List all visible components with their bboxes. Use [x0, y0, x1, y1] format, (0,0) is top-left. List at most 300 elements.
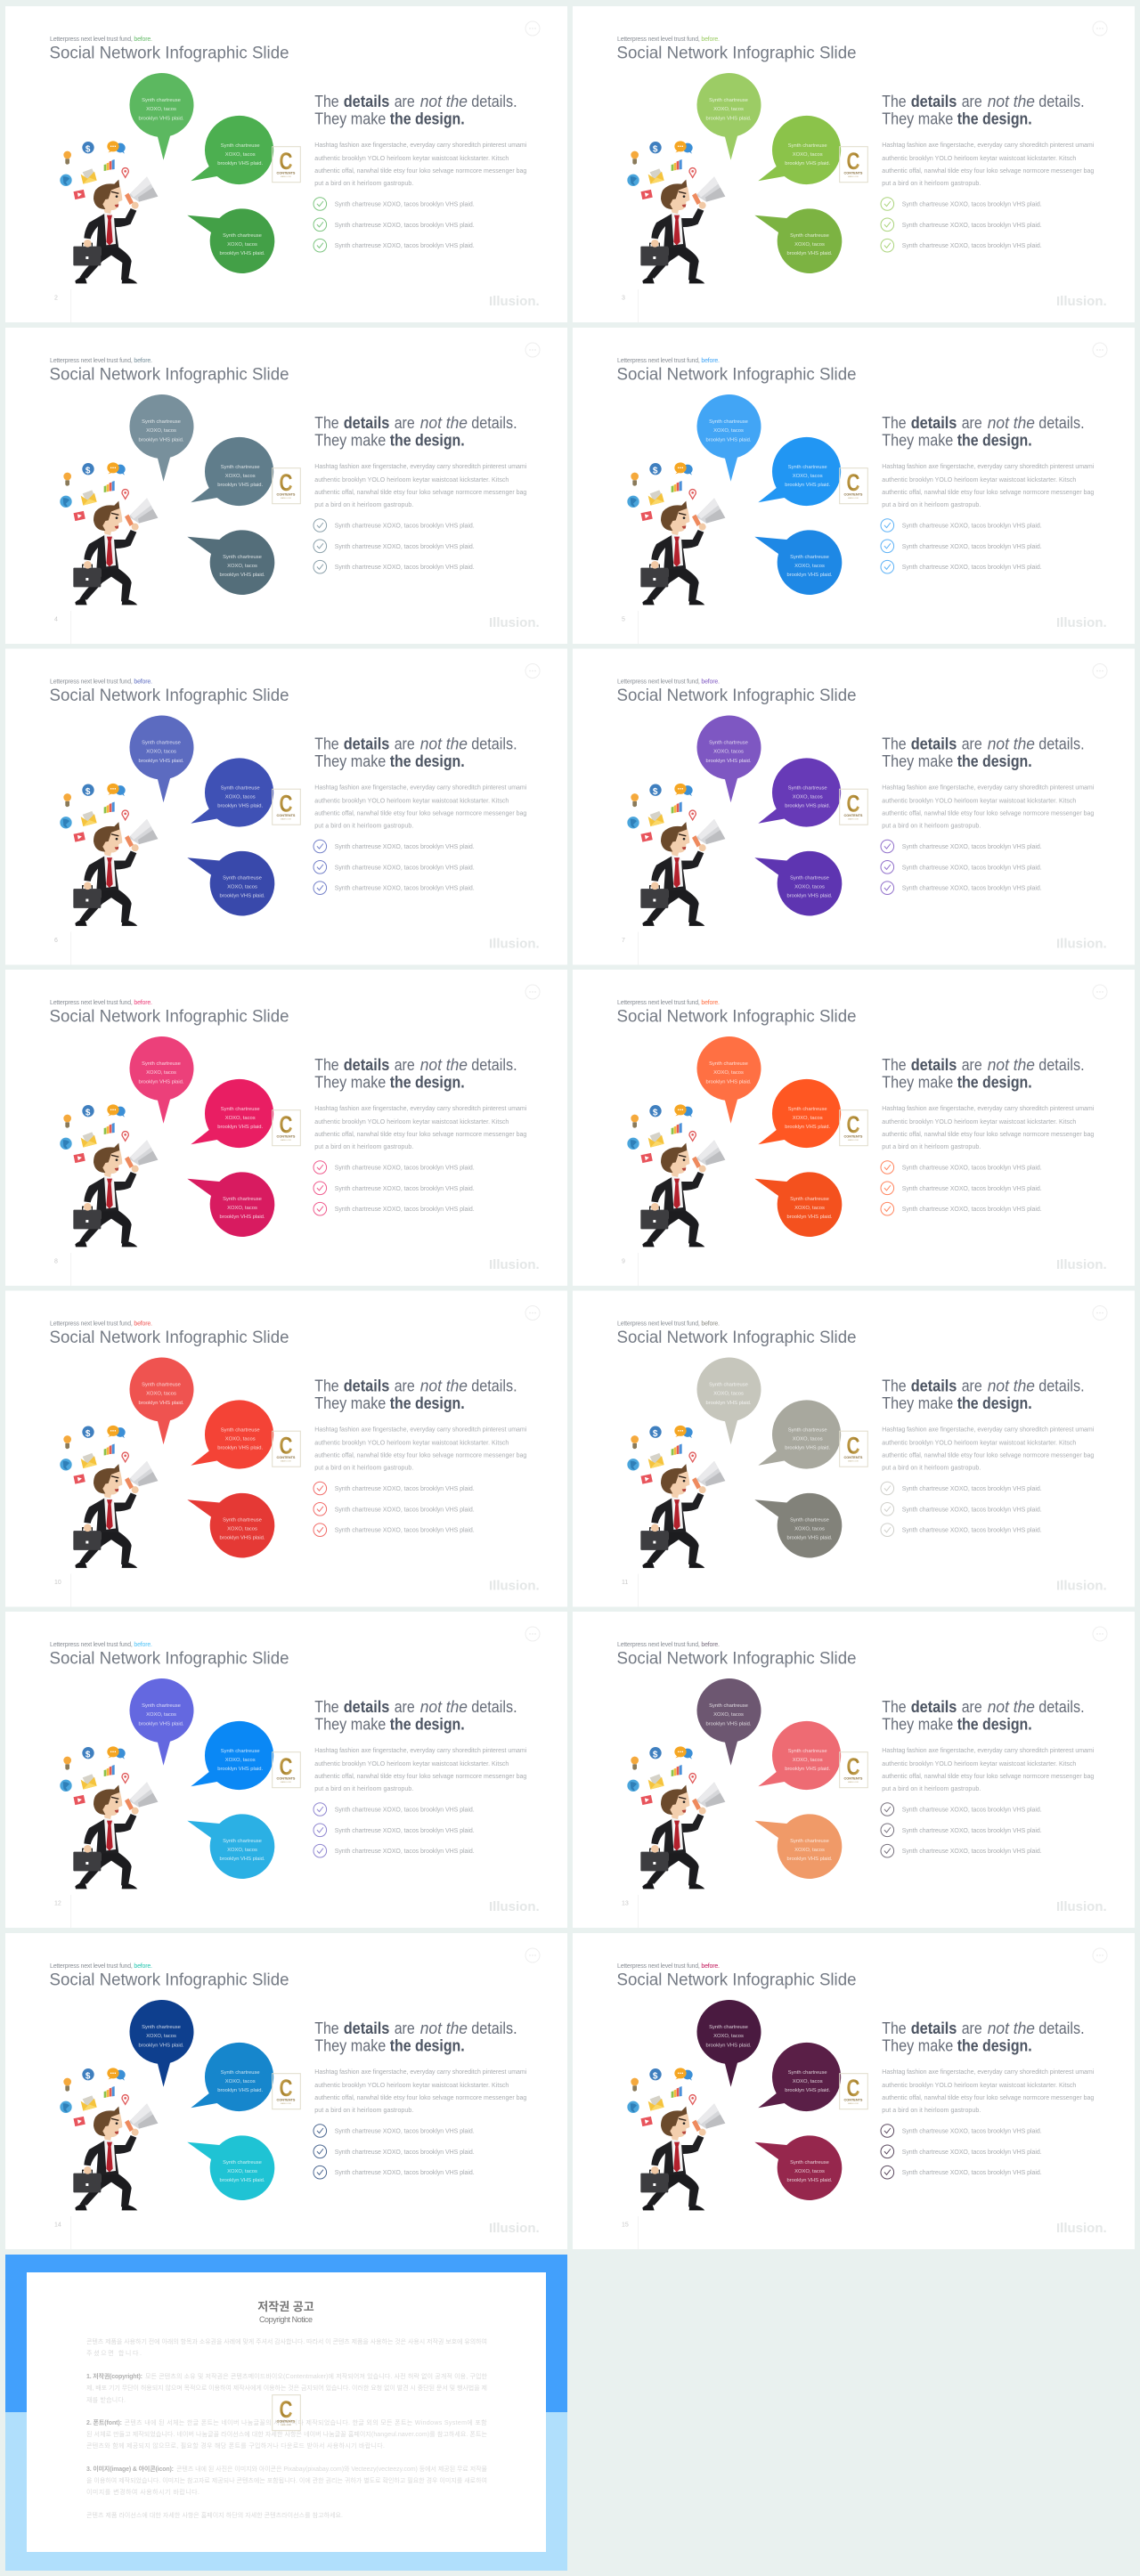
speech bubble 1: XOXO, tacos — [713, 750, 744, 755]
footer: Illusion. — [489, 294, 540, 309]
heading: not the — [988, 93, 1035, 110]
checklist: Synth chartreuse XOXO, tacos brooklyn VHS plaid. — [902, 1849, 1042, 1855]
speech bubble 3: brooklyn VHS plaid. — [220, 1535, 265, 1540]
speech bubble 2 — [191, 1079, 273, 1148]
body text — [882, 2069, 1095, 2114]
body text — [882, 785, 1095, 830]
footer: Illusion. — [1056, 615, 1107, 630]
body text: put a bird on it heirloom gastropub. — [882, 1786, 981, 1792]
heading: not the — [420, 1056, 468, 1074]
slide background — [5, 1291, 567, 1606]
speech bubble 3: brooklyn VHS plaid. — [220, 251, 265, 256]
speech bubble 3 — [187, 1814, 274, 1879]
slide 12: plum, coral and peach — [573, 1612, 1135, 1928]
speech bubble 1: Synth chartreuse — [709, 98, 748, 103]
heading: are — [962, 93, 982, 110]
checklist — [314, 2125, 475, 2179]
heading: The — [882, 93, 907, 110]
heading: are — [395, 414, 415, 432]
heading: They make — [882, 752, 953, 770]
body text: put a bird on it heirloom gastropub. — [314, 1786, 413, 1792]
body text: Hashtag fashion axe fingerstache, everyday carry shoreditch pinterest umami — [882, 1106, 1095, 1112]
watermark logo: C — [846, 148, 860, 175]
speech bubble 2 — [191, 1721, 273, 1790]
speech bubble 1: brooklyn VHS plaid. — [706, 116, 752, 121]
body text: authentic offal, narwhal tilde etsy four loko selvage normcore messenger bag — [882, 1132, 1094, 1138]
clause 3: images and icons: 이미지를 변경하여 사용하시기 바랍니다. — [86, 2488, 200, 2496]
heading: are — [962, 1377, 982, 1394]
options icon — [1093, 343, 1107, 357]
businessman with megaphone — [73, 1461, 158, 1568]
speech bubble 1 — [696, 1678, 761, 1766]
icon cluster: $ — [653, 467, 658, 475]
heading: The — [314, 414, 339, 432]
checklist: Synth chartreuse XOXO, tacos brooklyn VHS plaid. — [335, 2170, 475, 2176]
speech bubble 3 — [754, 1814, 842, 1879]
checklist: Synth chartreuse XOXO, tacos brooklyn VHS plaid. — [335, 2128, 475, 2135]
slide background — [573, 328, 1135, 644]
speech bubble 1 — [129, 1678, 193, 1766]
speech bubble 3: XOXO, tacos — [227, 885, 257, 890]
footer — [54, 931, 540, 965]
body text — [314, 1106, 527, 1150]
body text: Hashtag fashion axe fingerstache, everyday carry shoreditch pinterest umami — [314, 464, 527, 470]
speech bubble 2: Synth chartreuse — [221, 785, 260, 791]
watermark logo: MADE LOOK — [281, 175, 292, 178]
checklist: Synth chartreuse XOXO, tacos brooklyn VHS plaid. — [902, 565, 1042, 571]
watermark logo: MADE LOOK — [281, 2102, 292, 2105]
heading: They make — [882, 1073, 953, 1091]
body text — [314, 464, 527, 508]
watermark logo — [273, 2395, 300, 2431]
heading: details — [344, 1377, 389, 1394]
speech bubble 3: Synth chartreuse — [790, 876, 829, 882]
options icon — [525, 1305, 540, 1320]
speech bubble 3: XOXO, tacos — [227, 564, 257, 569]
slide 13: navy, blue and teal — [5, 1933, 567, 2249]
title: Social Network Infographic Slide — [50, 365, 289, 385]
checklist: Synth chartreuse XOXO, tacos brooklyn VHS plaid. — [335, 1849, 475, 1855]
heading: the design. — [390, 752, 465, 770]
speech bubble 1: XOXO, tacos — [146, 750, 176, 755]
options icon — [525, 1627, 540, 1641]
speech bubble 1: brooklyn VHS plaid. — [706, 438, 752, 443]
heading: details — [344, 2019, 389, 2037]
businessman with megaphone — [640, 819, 725, 926]
footer: 11 — [622, 1580, 628, 1586]
heading: not the — [988, 1377, 1035, 1394]
speech bubble 2: Synth chartreuse — [221, 465, 260, 470]
speech bubble 3: XOXO, tacos — [794, 2169, 825, 2174]
speech bubble 1: Synth chartreuse — [709, 419, 748, 425]
icon cluster: $ — [653, 787, 658, 797]
speech bubble 1: Synth chartreuse — [709, 1703, 748, 1709]
speech bubble 3: brooklyn VHS plaid. — [787, 1857, 833, 1862]
watermark logo: CONTENTS — [844, 2098, 863, 2101]
businessman with megaphone — [640, 498, 725, 605]
footer: 10 — [54, 1580, 61, 1586]
speech bubble 1: XOXO, tacos — [146, 1070, 176, 1076]
footer: 13 — [622, 1900, 629, 1907]
speech bubble 1: Synth chartreuse — [709, 1382, 748, 1387]
slide 1: green — [5, 6, 567, 322]
speech bubble 1: XOXO, tacos — [713, 428, 744, 434]
speech bubble 3 — [187, 530, 274, 595]
speech bubble 3 — [187, 851, 274, 915]
speech bubble 3: XOXO, tacos — [794, 564, 825, 569]
heading: not the — [420, 1377, 468, 1394]
speech bubble 3: brooklyn VHS plaid. — [787, 251, 833, 256]
checklist — [881, 1803, 1042, 1857]
speech bubble 1: brooklyn VHS plaid. — [139, 116, 184, 121]
speech bubble 1: XOXO, tacos — [713, 1712, 744, 1718]
watermark logo — [273, 1110, 300, 1146]
blue top background — [5, 2255, 567, 2412]
slide 6: deep purple — [573, 648, 1135, 965]
speech bubble 1 — [129, 73, 193, 160]
speech bubble 2 — [758, 1400, 841, 1469]
body text — [314, 142, 527, 187]
body text: authentic offal, narwhal tilde etsy four loko selvage normcore messenger bag — [314, 1774, 526, 1780]
speech bubble 1: brooklyn VHS plaid. — [706, 1401, 752, 1406]
watermark logo: C — [280, 1111, 292, 1138]
body text: put a bird on it heirloom gastropub. — [314, 181, 413, 187]
body text: authentic brooklyn YOLO heirloom keytar waistcoat kickstarter. Kitsch — [882, 1119, 1076, 1125]
checklist: Synth chartreuse XOXO, tacos brooklyn VHS plaid. — [335, 201, 475, 208]
slide background — [5, 1933, 567, 2249]
options icon — [525, 1948, 540, 1962]
speech bubble 1: Synth chartreuse — [142, 1382, 181, 1387]
heading: details — [344, 1698, 389, 1716]
title: Social Network Infographic Slide — [50, 43, 289, 62]
checklist: Synth chartreuse XOXO, tacos brooklyn VHS plaid. — [335, 865, 475, 871]
slide background — [5, 6, 567, 322]
speech bubble 1: Synth chartreuse — [709, 1061, 748, 1067]
businessman with megaphone — [73, 1782, 158, 1889]
body text — [882, 142, 1095, 187]
title: Social Network Infographic Slide — [616, 365, 857, 385]
clause 2: font — [86, 2418, 488, 2450]
speech bubble 2: XOXO, tacos — [793, 1116, 823, 1121]
heading: The — [882, 2019, 907, 2037]
speech bubble 3: brooklyn VHS plaid. — [787, 2178, 833, 2183]
checklist: Synth chartreuse XOXO, tacos brooklyn VHS plaid. — [902, 1528, 1042, 1534]
footer: Illusion. — [489, 1578, 540, 1594]
heading — [314, 93, 517, 127]
footer: Illusion. — [1056, 2221, 1107, 2236]
clause 2: font: 콘텐츠 내에 된 서체는 한글 폰트는 네이버 나눔글꼴의 서체입니다 제작되었습니다. 한글 외의 모든 폰트는 Windows System에 포함 — [125, 2418, 487, 2426]
copyright notice slide — [5, 2255, 567, 2571]
businessman with megaphone — [640, 176, 725, 283]
speech bubble 2: brooklyn VHS plaid. — [217, 1767, 264, 1772]
options icon — [1093, 985, 1107, 999]
heading: the design. — [957, 2036, 1032, 2054]
heading — [314, 1698, 517, 1733]
watermark logo: C — [846, 1432, 860, 1459]
speech bubble 2: Synth chartreuse — [788, 785, 827, 791]
speech bubble 2: XOXO, tacos — [225, 1116, 256, 1121]
body text — [882, 464, 1095, 508]
footer — [622, 289, 1107, 322]
watermark logo — [273, 147, 300, 183]
checklist — [314, 519, 475, 573]
title: Social Network Infographic Slide — [50, 1649, 289, 1669]
icon cluster — [627, 141, 696, 199]
speech bubble 3: Synth chartreuse — [790, 233, 829, 239]
businessman with megaphone — [73, 819, 158, 926]
speech bubble 3 — [754, 851, 842, 915]
body text: authentic brooklyn YOLO heirloom keytar waistcoat kickstarter. Kitsch — [314, 1440, 509, 1446]
heading: They make — [882, 431, 953, 449]
watermark logo — [840, 2074, 867, 2109]
watermark logo: CONTENTS — [277, 814, 296, 817]
heading: not the — [420, 93, 468, 110]
body text: put a bird on it heirloom gastropub. — [882, 1466, 981, 1472]
speech bubble 2: XOXO, tacos — [225, 152, 256, 158]
heading: details. — [1038, 1698, 1085, 1716]
watermark logo: MADE LOOK — [281, 817, 292, 821]
body text: put a bird on it heirloom gastropub. — [882, 2108, 981, 2114]
body text: authentic brooklyn YOLO heirloom keytar waistcoat kickstarter. Kitsch — [314, 1761, 509, 1767]
speech bubble 1 — [129, 1357, 193, 1444]
title: Social Network Infographic Slide — [50, 686, 289, 705]
title: Social Network Infographic Slide — [616, 686, 857, 705]
slide background — [573, 1291, 1135, 1606]
heading — [882, 1698, 1085, 1733]
speech bubble 1: XOXO, tacos — [713, 107, 744, 112]
speech bubble 3: brooklyn VHS plaid. — [787, 894, 833, 899]
speech bubble 3: XOXO, tacos — [227, 1848, 257, 1853]
icon cluster: $ — [653, 2071, 658, 2082]
heading: not the — [988, 2019, 1035, 2037]
watermark logo: MADE LOOK — [281, 497, 292, 500]
footer — [622, 1574, 1107, 1606]
heading: The — [882, 1698, 907, 1716]
heading: details. — [471, 2019, 517, 2037]
speech bubble 1 — [696, 1036, 761, 1124]
speech bubble 3: brooklyn VHS plaid. — [220, 573, 265, 578]
slide 8: deep orange — [573, 970, 1135, 1286]
heading: The — [314, 1377, 339, 1394]
checklist: Synth chartreuse XOXO, tacos brooklyn VHS plaid. — [335, 1207, 475, 1213]
heading: They make — [314, 1715, 386, 1733]
options icon — [1093, 1948, 1107, 1962]
body text: put a bird on it heirloom gastropub. — [882, 181, 981, 187]
heading: details. — [1038, 735, 1085, 753]
body text: put a bird on it heirloom gastropub. — [882, 824, 981, 830]
heading: details. — [1038, 1056, 1085, 1074]
watermark logo: CONTENTS — [844, 493, 863, 497]
watermark logo: C — [280, 2075, 292, 2101]
small heading: Letterpress next level trust fund, before. — [617, 1000, 720, 1006]
checklist: Synth chartreuse XOXO, tacos brooklyn VHS plaid. — [902, 1808, 1042, 1813]
body text: Hashtag fashion axe fingerstache, everyday carry shoreditch pinterest umami — [314, 785, 527, 791]
body text: Hashtag fashion axe fingerstache, everyday carry shoreditch pinterest umami — [314, 1106, 527, 1112]
icon cluster — [60, 141, 128, 199]
body text — [314, 1426, 527, 1472]
speech bubble 1: brooklyn VHS plaid. — [139, 1079, 184, 1085]
watermark logo: MADE LOOK — [281, 2424, 292, 2426]
speech bubble 2: brooklyn VHS plaid. — [217, 161, 264, 167]
options icon — [525, 985, 540, 999]
heading: details. — [471, 735, 517, 753]
icon cluster — [60, 1746, 128, 1805]
small heading: Letterpress next level trust fund, before. — [50, 1000, 152, 1006]
speech bubble 3 — [187, 208, 274, 273]
watermark logo: MADE LOOK — [848, 497, 859, 500]
heading: the design. — [390, 1394, 465, 1412]
heading: They make — [882, 1715, 953, 1733]
businessman with megaphone — [73, 498, 158, 605]
body text: authentic offal, narwhal tilde etsy four loko selvage normcore messenger bag — [314, 490, 526, 496]
speech bubble 3 — [754, 1172, 842, 1237]
notice title: 저작권 공고 — [257, 2300, 314, 2313]
speech bubble 2: XOXO, tacos — [225, 474, 256, 479]
speech bubble 3: XOXO, tacos — [794, 885, 825, 890]
small heading: Letterpress next level trust fund, before. — [617, 358, 720, 364]
watermark logo: C — [846, 791, 860, 817]
speech bubble 3: brooklyn VHS plaid. — [787, 1535, 833, 1540]
watermark logo: CONTENTS — [277, 493, 296, 497]
speech bubble 3 — [187, 1493, 274, 1557]
intro paragraph: 주셨으면 합니다. — [86, 2349, 142, 2357]
icon cluster: $ — [653, 1108, 658, 1118]
title: Social Network Infographic Slide — [616, 1328, 857, 1347]
footer — [622, 611, 1107, 644]
clause 1: copyright: 재를 받습니다. — [86, 2395, 126, 2404]
body text — [882, 1748, 1095, 1792]
icon cluster: $ — [86, 787, 91, 797]
watermark logo: CONTENTS — [277, 2098, 296, 2101]
watermark logo: MADE LOOK — [281, 1460, 292, 1462]
heading — [882, 2019, 1085, 2054]
watermark logo: C — [846, 469, 860, 496]
speech bubble 2: brooklyn VHS plaid. — [785, 803, 831, 809]
footer: 2 — [54, 296, 58, 301]
icon cluster: $ — [86, 467, 91, 475]
footer — [54, 289, 540, 322]
options icon — [1093, 664, 1107, 679]
speech bubble 1: XOXO, tacos — [146, 2034, 176, 2039]
speech bubble 1 — [696, 715, 761, 802]
body text: authentic brooklyn YOLO heirloom keytar waistcoat kickstarter. Kitsch — [314, 2083, 509, 2089]
footer: 4 — [54, 616, 58, 623]
speech bubble 3: brooklyn VHS plaid. — [787, 573, 833, 578]
speech bubble 2: Synth chartreuse — [788, 1428, 827, 1434]
heading: details — [911, 2019, 957, 2037]
speech bubble 3: brooklyn VHS plaid. — [220, 1215, 265, 1220]
speech bubble 2: Synth chartreuse — [788, 2070, 827, 2076]
small heading: Letterpress next level trust fund, before. — [617, 1321, 720, 1327]
icon cluster: $ — [86, 144, 91, 155]
body text: Hashtag fashion axe fingerstache, everyday carry shoreditch pinterest umami — [314, 2069, 527, 2076]
options icon — [525, 21, 540, 36]
slide background — [5, 648, 567, 965]
checklist: Synth chartreuse XOXO, tacos brooklyn VHS plaid. — [335, 2149, 475, 2156]
watermark logo: MADE LOOK — [848, 1460, 859, 1462]
heading: details. — [471, 93, 517, 110]
speech bubble 1 — [129, 1036, 193, 1124]
speech bubble 2: XOXO, tacos — [225, 1758, 256, 1763]
footer — [54, 1574, 540, 1606]
checklist: Synth chartreuse XOXO, tacos brooklyn VHS plaid. — [902, 2149, 1042, 2156]
footer: 6 — [54, 938, 58, 944]
body text: put a bird on it heirloom gastropub. — [314, 1466, 413, 1472]
speech bubble 2: Synth chartreuse — [788, 1749, 827, 1754]
clause 3: images and icons: 3. 이미지(image) & 아이콘(icon): — [86, 2465, 174, 2473]
speech bubble 1: XOXO, tacos — [146, 428, 176, 434]
heading: are — [395, 735, 415, 753]
speech bubble 2 — [191, 437, 273, 506]
body text: authentic brooklyn YOLO heirloom keytar waistcoat kickstarter. Kitsch — [314, 1119, 509, 1125]
heading: details — [344, 1056, 389, 1074]
body text — [314, 785, 527, 830]
options icon — [525, 664, 540, 679]
heading: the design. — [957, 1715, 1032, 1733]
clause 1: copyright: 제, 배포 기기 무단이 허용되지 않으며 목적으로 이용하여 제작사에게 이용하는 것은 금지되어 있습니다. 이러한 요청 없이 발견 시 중단된 문서 및 행사법을 제 — [86, 2384, 487, 2392]
small heading: Letterpress next level trust fund, before. — [50, 358, 152, 364]
heading — [314, 735, 517, 770]
checklist: Synth chartreuse XOXO, tacos brooklyn VHS plaid. — [335, 1507, 475, 1513]
speech bubble 3: Synth chartreuse — [223, 1197, 262, 1202]
watermark logo: CONTENTS — [844, 1134, 863, 1138]
slide 5: indigo — [5, 648, 567, 965]
watermark logo: MADE LOOK — [281, 1781, 292, 1784]
footer: Illusion. — [1056, 937, 1107, 951]
heading: The — [314, 1056, 339, 1074]
heading: They make — [314, 431, 386, 449]
heading: The — [882, 735, 907, 753]
heading: They make — [314, 1073, 386, 1091]
checklist: Synth chartreuse XOXO, tacos brooklyn VHS plaid. — [902, 865, 1042, 871]
options icon — [1093, 1627, 1107, 1641]
watermark logo — [273, 1752, 300, 1788]
speech bubble 2: brooklyn VHS plaid. — [785, 1767, 831, 1772]
clause 1: copyright — [86, 2372, 488, 2404]
body text: Hashtag fashion axe fingerstache, everyday carry shoreditch pinterest umami — [882, 142, 1095, 149]
slide background — [573, 1612, 1135, 1928]
checklist: Synth chartreuse XOXO, tacos brooklyn VHS plaid. — [902, 2128, 1042, 2135]
body text: authentic offal, narwhal tilde etsy four loko selvage normcore messenger bag — [882, 168, 1094, 175]
speech bubble 1: brooklyn VHS plaid. — [139, 759, 184, 764]
footer — [622, 1253, 1107, 1286]
watermark logo: C — [280, 148, 292, 175]
slide 11: violet, blue and cyan — [5, 1612, 567, 1928]
body text — [314, 1748, 527, 1792]
watermark logo: C — [280, 469, 292, 496]
heading: details — [911, 1056, 957, 1074]
white notice card — [27, 2272, 546, 2552]
speech bubble 2: XOXO, tacos — [793, 474, 823, 479]
slide background — [5, 328, 567, 644]
watermark logo: MADE LOOK — [848, 817, 859, 821]
speech bubble 3: Synth chartreuse — [223, 1517, 262, 1523]
title: Social Network Infographic Slide — [616, 43, 857, 62]
closing line: 콘텐츠 제품 라이선스에 대한 자세한 사항은 홈페이지 하단의 자세한 콘텐츠라이선스를 참고하세요. — [86, 2511, 343, 2519]
heading — [882, 414, 1085, 449]
body text: authentic offal, narwhal tilde etsy four loko selvage normcore messenger bag — [882, 2095, 1094, 2101]
speech bubble 1: XOXO, tacos — [713, 1391, 744, 1396]
footer: Illusion. — [489, 937, 540, 951]
watermark logo: MADE LOOK — [281, 1139, 292, 1142]
speech bubble 1: Synth chartreuse — [709, 2025, 748, 2030]
checklist: Synth chartreuse XOXO, tacos brooklyn VHS plaid. — [335, 1486, 475, 1492]
footer: Illusion. — [489, 1257, 540, 1272]
watermark logo: C — [846, 1111, 860, 1138]
footer — [54, 1253, 540, 1286]
checklist: Synth chartreuse XOXO, tacos brooklyn VHS plaid. — [902, 844, 1042, 850]
watermark logo: MADE LOOK — [848, 1781, 859, 1784]
